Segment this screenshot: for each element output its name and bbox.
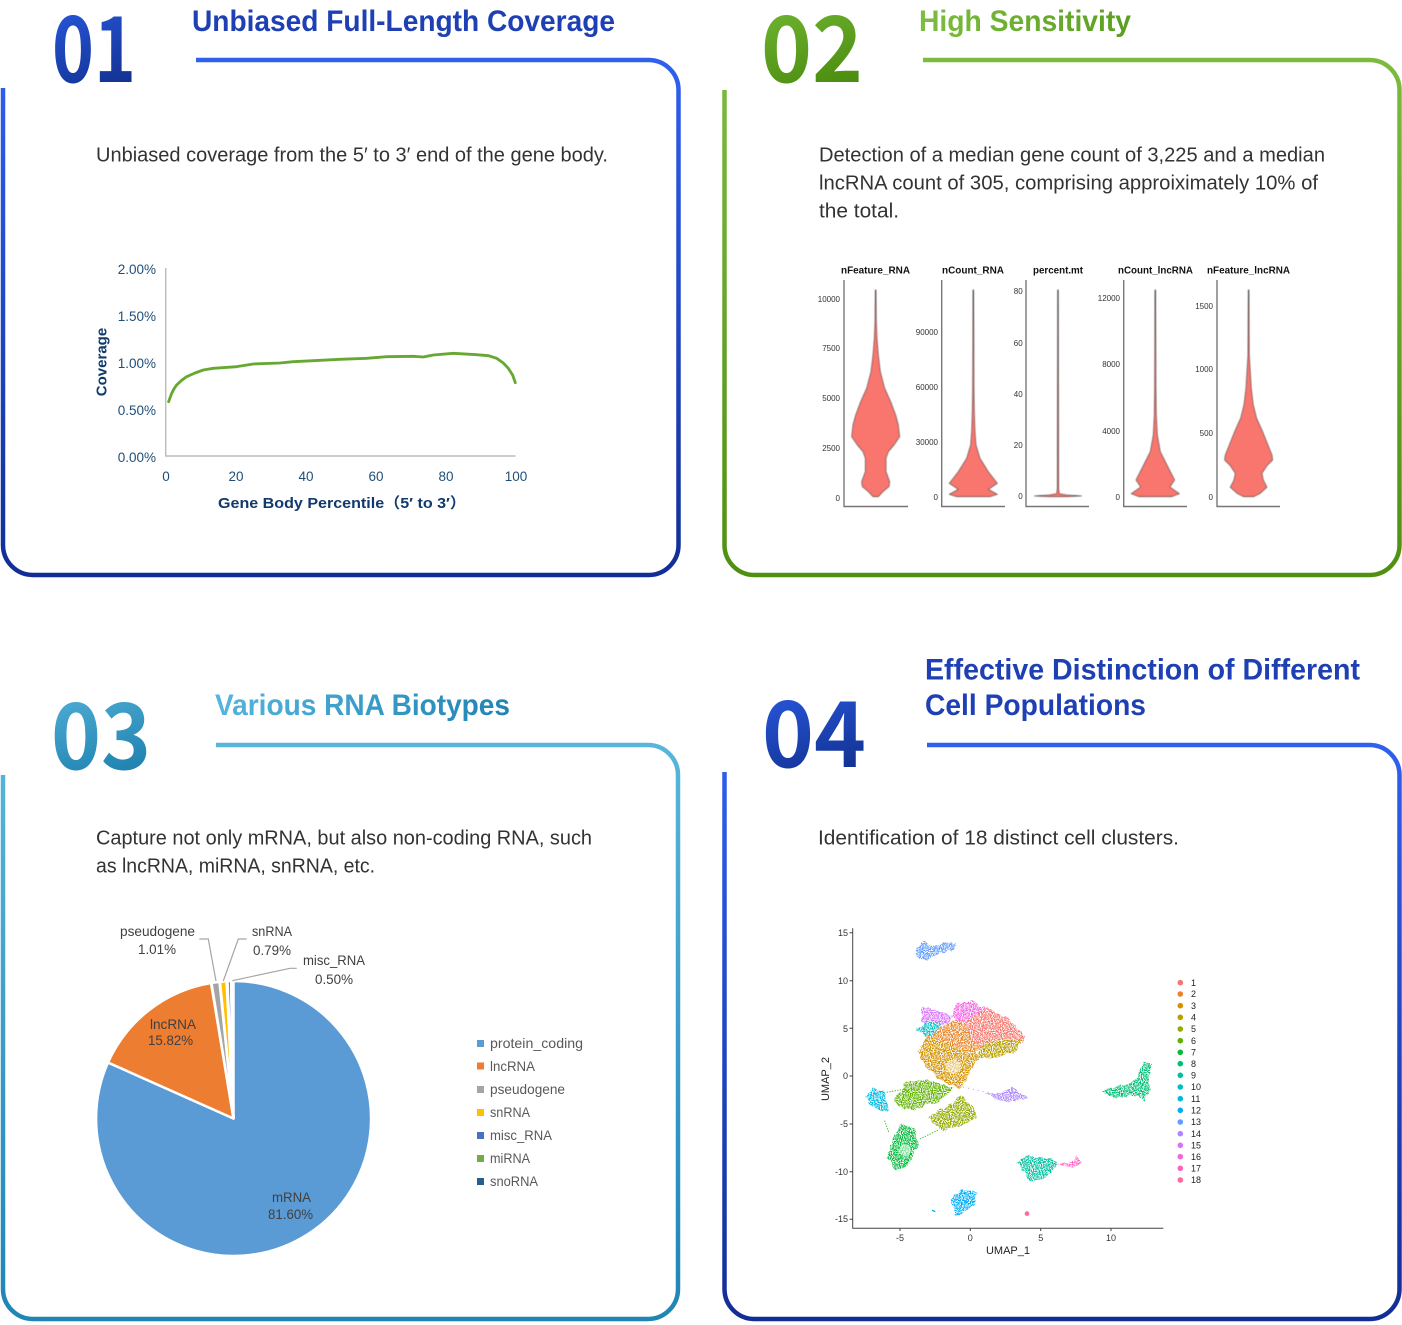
panel 03 frame: [3, 745, 678, 1319]
pie legend: misc_RNA: [490, 1127, 553, 1143]
violin: nFeature_lncRNA: 500: [1200, 429, 1214, 438]
violin: nCount_lncRNA: 8000: [1102, 360, 1121, 369]
violin: nCount_lncRNA: 0: [1116, 493, 1121, 502]
UMAP scatter plot: 10: [1106, 1233, 1116, 1243]
body text 04: Identification of 18 distinct cell clusters.: [818, 828, 1179, 850]
violin: nFeature_RNA: 0: [836, 494, 841, 503]
UMAP scatter plot: UMAP_1: [986, 1245, 1030, 1257]
UMAP scatter plot: 5: [1038, 1233, 1043, 1243]
pie legend: lncRNA: [490, 1058, 536, 1074]
UMAP cluster legend: 16: [1191, 1152, 1201, 1162]
UMAP cluster legend: 11: [1191, 1094, 1200, 1104]
UMAP cluster legend: 8: [1191, 1059, 1196, 1069]
line chart: gene body coverage: [94, 262, 527, 512]
number 03: 03: [51, 664, 151, 796]
line chart: gene body coverage: 0: [162, 469, 170, 484]
UMAP cluster legend: 10: [1191, 1082, 1201, 1092]
UMAP cluster legend: 12: [1191, 1106, 1201, 1116]
line chart: gene body coverage: 0.00%: [118, 450, 156, 465]
UMAP scatter plot: 10: [838, 976, 848, 986]
pie chart: RNA biotypes: mRNA: [272, 1189, 312, 1205]
line chart: gene body coverage: 40: [298, 469, 314, 484]
pie legend: miRNA: [490, 1150, 531, 1166]
UMAP cluster legend: 7: [1191, 1048, 1196, 1058]
pie chart: RNA biotypes: 15.82%: [148, 1032, 193, 1048]
panel: 04 distinct cell populations: [724, 654, 1400, 1319]
heading 04: [925, 654, 1360, 722]
violin: percent.mt: [1014, 266, 1089, 506]
violin: nFeature_RNA: 10000: [818, 295, 841, 304]
violin: nCount_RNA: 90000: [916, 328, 939, 337]
violin: nCount_RNA: [916, 266, 1005, 506]
pie legend: [477, 1035, 583, 1189]
UMAP cluster legend: 3: [1191, 1001, 1196, 1011]
line chart: gene body coverage: 1.50%: [118, 309, 156, 324]
pie legend: protein_coding: [490, 1035, 583, 1051]
panel: 03 various RNA biotypes: [3, 664, 678, 1319]
line chart: gene body coverage: Gene Body Percentile（5′ to 3′）: [218, 495, 466, 512]
UMAP scatter plot: -5: [840, 1119, 848, 1129]
UMAP cluster legend: 17: [1191, 1164, 1201, 1174]
violin: nFeature_RNA: 5000: [822, 394, 841, 403]
UMAP cluster legend: 2: [1191, 989, 1196, 999]
line chart: gene body coverage: 2.00%: [118, 262, 156, 277]
UMAP scatter plot: -10: [835, 1167, 848, 1177]
violin plots: [818, 266, 1290, 506]
violin: nFeature_RNA: 2500: [822, 444, 841, 453]
violin: nCount_lncRNA: 12000: [1098, 294, 1121, 303]
violin: percent.mt: 0: [1018, 492, 1023, 501]
line chart: gene body coverage: Coverage: [94, 328, 110, 396]
pie chart: RNA biotypes: 1.01%: [138, 941, 176, 957]
line chart: gene body coverage: 20: [228, 469, 244, 484]
body text 03: as lncRNA, miRNA, snRNA, etc.: [96, 856, 375, 878]
heading 02: High Sensitivity: [919, 5, 1131, 38]
violin: nCount_lncRNA: nCount_lncRNA: [1118, 266, 1193, 276]
number 04: 04: [762, 662, 866, 794]
violin: nCount_lncRNA: 4000: [1102, 427, 1121, 436]
violin: percent.mt: percent.mt: [1033, 266, 1084, 276]
violin: nFeature_RNA: nFeature_RNA: [841, 266, 910, 276]
pie chart: RNA biotypes: pseudogene: [120, 923, 195, 939]
pie chart: RNA biotypes: 0.50%: [315, 971, 353, 987]
pie chart: RNA biotypes: misc_RNA: [303, 952, 366, 968]
violin: percent.mt: 80: [1014, 287, 1023, 296]
pie chart: RNA biotypes: snRNA: [252, 923, 293, 939]
UMAP scatter plot: 15: [838, 928, 848, 938]
UMAP cluster legend: 15: [1191, 1140, 1201, 1150]
pie chart: RNA biotypes: 81.60%: [268, 1206, 313, 1222]
heading 03: Various RNA Biotypes: [215, 689, 510, 722]
body text 03: [96, 828, 592, 878]
panel 01 frame: [3, 60, 678, 575]
pie chart: RNA biotypes: lncRNA: [150, 1016, 197, 1032]
pie legend: snRNA: [490, 1104, 531, 1120]
pie legend: snoRNA: [490, 1173, 539, 1189]
heading 04: Cell Populations: [925, 689, 1146, 722]
panel 04 frame: [724, 745, 1400, 1319]
UMAP scatter plot: -5: [896, 1233, 904, 1243]
body text 02: the total.: [819, 200, 899, 222]
violin: nFeature_lncRNA: 1000: [1195, 365, 1214, 374]
line chart: gene body coverage: 100: [505, 469, 527, 484]
UMAP cluster legend: 18: [1191, 1175, 1201, 1185]
UMAP scatter plot: 0: [968, 1233, 973, 1243]
violin: nFeature_lncRNA: 0: [1209, 493, 1214, 502]
UMAP cluster legend: 9: [1191, 1070, 1196, 1080]
violin: nFeature_RNA: 7500: [822, 344, 841, 353]
UMAP scatter plot: UMAP_2: [820, 1057, 832, 1101]
violin: nCount_RNA: 0: [934, 493, 939, 502]
UMAP scatter plot: 5: [843, 1024, 848, 1034]
panel: 01 unbiased full-length coverage: [3, 0, 678, 575]
violin: percent.mt: 20: [1014, 441, 1023, 450]
pie legend: pseudogene: [490, 1081, 565, 1097]
pie chart: RNA biotypes: [96, 923, 371, 1256]
violin: nCount_lncRNA: [1098, 266, 1193, 506]
UMAP cluster legend: 1: [1191, 978, 1196, 988]
line chart: gene body coverage: 1.00%: [118, 356, 156, 371]
violin: nFeature_lncRNA: [1195, 266, 1290, 506]
pie chart: RNA biotypes: 0.79%: [253, 942, 291, 958]
UMAP scatter plot: -15: [835, 1214, 848, 1224]
panel: 02 high sensitivity: [724, 0, 1400, 575]
line chart: gene body coverage: 80: [438, 469, 454, 484]
UMAP cluster legend: [1178, 978, 1201, 1185]
body text 03: Capture not only mRNA, but also non-coding RNA, such: [96, 828, 592, 850]
violin: percent.mt: 40: [1014, 390, 1023, 399]
violin: nCount_RNA: 60000: [916, 383, 939, 392]
violin: percent.mt: 60: [1014, 339, 1023, 348]
UMAP cluster legend: 14: [1191, 1129, 1201, 1139]
body text 02: Detection of a median gene count of 3,225 and a median: [819, 144, 1325, 166]
UMAP cluster legend: 13: [1191, 1117, 1201, 1127]
violin: nCount_RNA: 30000: [916, 438, 939, 447]
violin: nFeature_lncRNA: 1500: [1195, 302, 1214, 311]
body text 02: lncRNA count of 305, comprising approiximately 10% of: [819, 172, 1318, 194]
body text 01: Unbiased coverage from the 5′ to 3′ end of the gene body.: [96, 144, 608, 166]
line chart: gene body coverage: 0.50%: [118, 403, 156, 418]
UMAP cluster legend: 5: [1191, 1024, 1196, 1034]
heading 04: Effective Distinction of Different: [925, 654, 1360, 686]
line chart: gene body coverage: 60: [368, 469, 384, 484]
violin: nFeature_lncRNA: nFeature_lncRNA: [1207, 266, 1290, 276]
heading 01: Unbiased Full-Length Coverage: [192, 5, 615, 38]
UMAP cluster legend: 4: [1191, 1012, 1196, 1022]
body text 02: [819, 144, 1325, 222]
UMAP scatter plot: 0: [843, 1071, 848, 1081]
violin: nFeature_RNA: [818, 266, 910, 506]
panel 02 frame: [724, 60, 1400, 575]
UMAP scatter plot: [820, 928, 1163, 1257]
violin: nCount_RNA: nCount_RNA: [942, 266, 1004, 276]
UMAP cluster legend: 6: [1191, 1036, 1196, 1046]
